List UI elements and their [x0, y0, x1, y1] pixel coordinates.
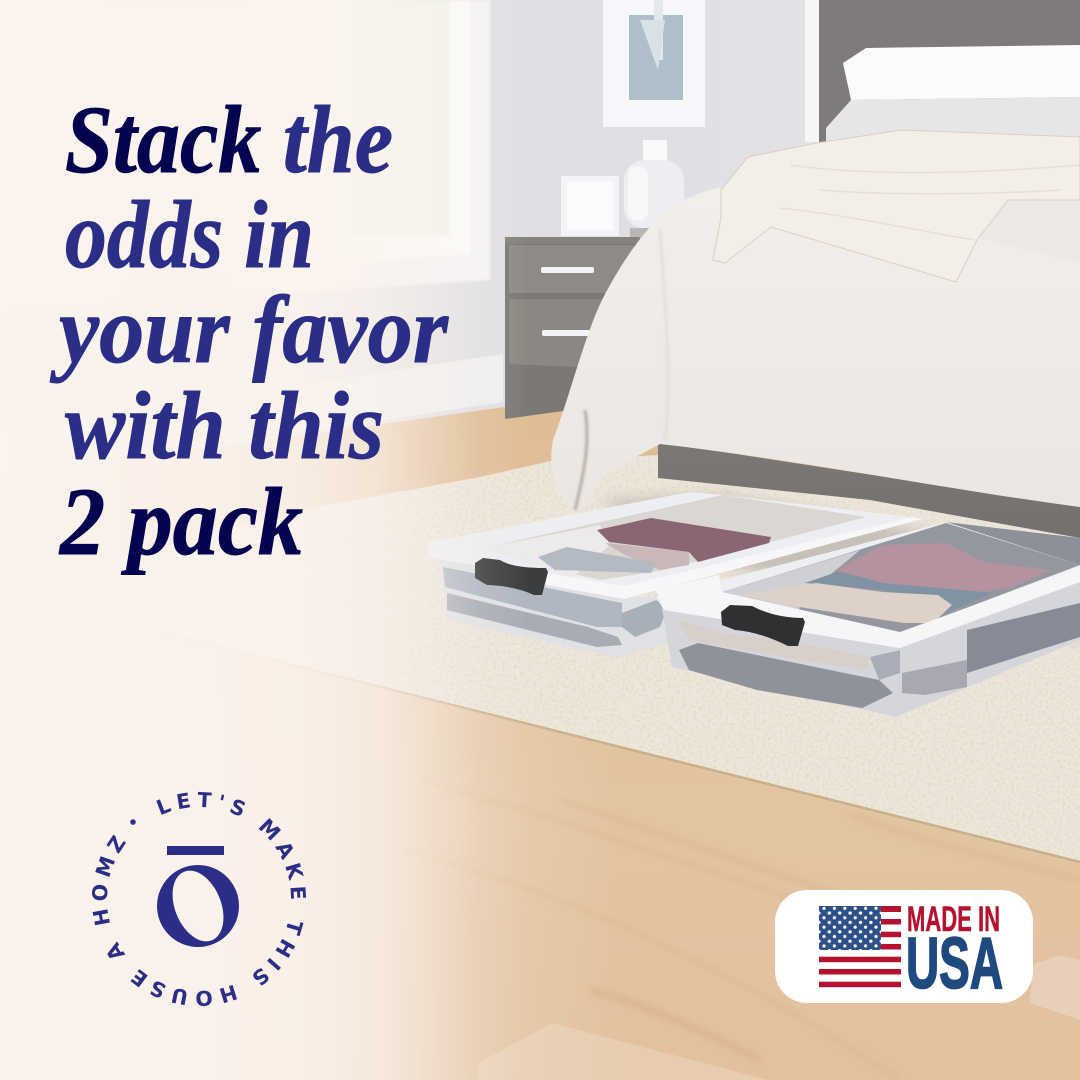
nightstand	[505, 237, 640, 419]
headline line 3: your favor	[50, 276, 450, 383]
logo bar	[167, 846, 224, 855]
box two haze near edge	[719, 550, 860, 620]
headline line 2: odds in	[65, 181, 314, 288]
floor plank highlight	[478, 1023, 768, 1080]
box one lid	[426, 492, 912, 597]
box spring	[658, 442, 1080, 538]
box two lid	[656, 522, 1080, 648]
flag	[819, 906, 901, 987]
box one pink garment	[605, 543, 689, 570]
throw blanket	[713, 130, 1080, 282]
box two: clear under-bed bin with lid and latch	[656, 522, 1080, 717]
box one grey garment	[538, 547, 656, 573]
box one haze	[483, 525, 610, 580]
headboard	[805, 0, 1080, 142]
pillows	[826, 45, 1080, 142]
USA text: USA	[906, 924, 1003, 1004]
box two pink garment	[835, 543, 1051, 592]
box one latch	[475, 558, 548, 595]
box one lid window	[483, 495, 866, 580]
box two lower folded garment	[679, 643, 893, 708]
made in USA badge	[775, 890, 1033, 1004]
wall	[0, 0, 1080, 480]
floor fade overlay	[0, 592, 620, 1080]
box two latch	[721, 605, 805, 646]
circular slogan: LET'S MAKE THIS HOUSE A HOMZ	[92, 792, 306, 1006]
box two cream folded garment	[678, 620, 870, 670]
box one base	[439, 555, 668, 658]
rug shadow under bed	[600, 495, 1080, 640]
lamp	[624, 140, 684, 239]
photo frame on nightstand	[561, 176, 619, 236]
brand seal	[92, 792, 306, 1006]
box two base	[662, 580, 1080, 717]
headline line 4: with this	[65, 372, 384, 479]
box two right garments	[967, 603, 1080, 673]
made in text: MADE IN	[907, 900, 1000, 939]
logo ring	[157, 865, 239, 947]
box two lid front rim	[656, 567, 1080, 648]
badge background	[775, 890, 1033, 1003]
rug	[0, 455, 1080, 862]
box one: clear under-bed bin with lid and latch	[426, 492, 922, 658]
box two cream garment on top	[740, 583, 952, 623]
picture frame	[603, 0, 705, 127]
box one lower folded garment	[447, 593, 622, 647]
headline	[50, 86, 450, 575]
duvet	[551, 188, 1080, 513]
headline line 5: 2 pack	[58, 468, 303, 575]
floor plank highlight right	[1030, 955, 1080, 1020]
floor wood grain	[400, 780, 1080, 1080]
box one lid front rim	[546, 517, 922, 599]
box one mauve garment	[597, 518, 771, 562]
duvet top fold	[977, 195, 1080, 262]
duvet folds	[575, 230, 668, 510]
box one upper folded garment	[443, 567, 622, 627]
box two shadow behind lid	[946, 522, 1080, 566]
baseboard	[0, 354, 503, 478]
box two blue garment	[805, 572, 992, 613]
box two side garment	[902, 660, 967, 695]
floor	[0, 400, 1080, 1080]
box two lid window	[719, 523, 1080, 633]
headline line 1: Stack the	[65, 86, 393, 193]
throw blanket ribs	[780, 165, 1080, 240]
box two centre garment	[870, 650, 900, 680]
window	[0, 0, 490, 312]
box one rolled garment	[622, 600, 668, 637]
seal dot	[130, 819, 136, 825]
